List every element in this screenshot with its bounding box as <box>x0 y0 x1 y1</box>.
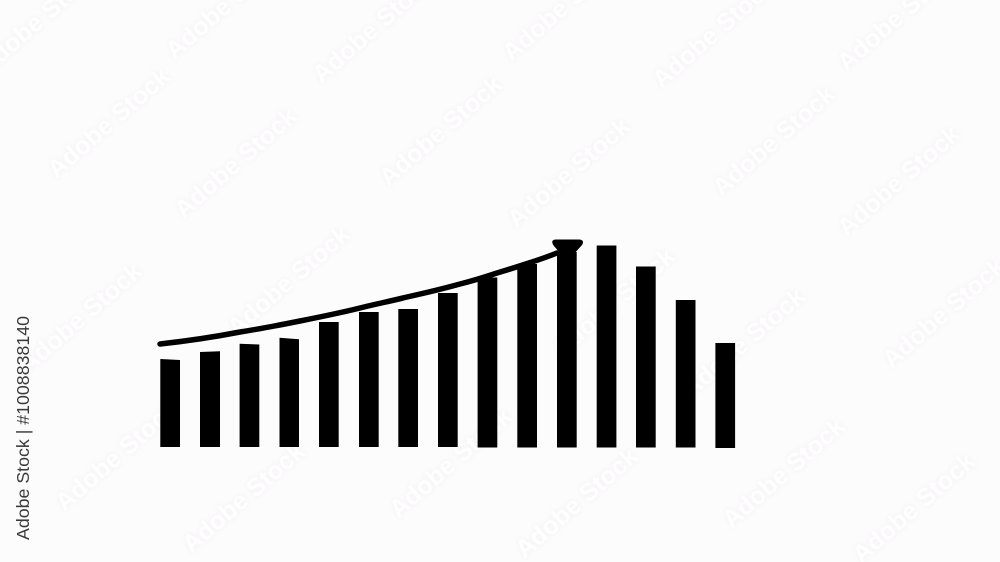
watermark text layer: Adobe Stock <box>42 62 176 184</box>
watermark text layer: Adobe Stock <box>374 70 508 192</box>
watermark shadow layer: Adobe Stock <box>510 442 644 562</box>
bar 11 <box>557 252 577 448</box>
bar 15 <box>715 343 735 448</box>
watermark text layer: Adobe Stock <box>177 437 311 559</box>
stock id label: Adobe Stock | #1008838140 <box>13 316 33 540</box>
bar 12 <box>597 246 616 448</box>
watermark text layer: Adobe Stock <box>169 102 303 224</box>
watermark shadow layer: Adobe Stock <box>502 112 636 234</box>
watermark shadow layer: Adobe Stock <box>547 242 681 364</box>
watermark text layer: Adobe Stock <box>717 412 851 534</box>
watermark shadow layer: Adobe Stock <box>177 437 311 559</box>
bar 3 <box>240 344 259 447</box>
bar 13 <box>636 266 656 448</box>
bar 10 <box>517 264 537 448</box>
bar 7 <box>398 309 418 447</box>
watermark shadow layer: Adobe Stock <box>707 80 841 202</box>
bar 5 <box>319 322 339 447</box>
trend arrow <box>160 240 583 344</box>
bar 14 <box>676 300 696 448</box>
watermark shadow layer: Adobe Stock <box>222 220 356 342</box>
watermark text layer: Adobe Stock <box>677 282 811 404</box>
watermark text layer: Adobe Stock <box>547 242 681 364</box>
bar chart <box>160 246 735 448</box>
arrow head <box>552 240 583 258</box>
watermark shadow layer: Adobe Stock <box>717 412 851 534</box>
bar 2 <box>200 351 220 447</box>
watermark shadow layer: Adobe Stock <box>169 102 303 224</box>
watermark text layer: Adobe Stock <box>502 112 636 234</box>
bar 9 <box>478 278 497 448</box>
watermark text layer: Adobe Stock <box>222 220 356 342</box>
watermark shadow layer: Adobe Stock <box>677 282 811 404</box>
watermark text layer: Adobe Stock <box>384 402 518 524</box>
watermark shadow layer: Adobe Stock <box>832 120 966 242</box>
watermark text layer: Adobe Stock <box>832 120 966 242</box>
watermark shadow layer: Adobe Stock <box>374 70 508 192</box>
bar 6 <box>359 312 379 447</box>
watermark shadow layer: Adobe Stock <box>14 257 148 379</box>
watermark text layer: Adobe Stock <box>14 257 148 379</box>
watermark shadow layer: Adobe Stock <box>42 62 176 184</box>
watermark text layer: Adobe Stock <box>510 442 644 562</box>
bar 4 <box>280 338 299 447</box>
bar 8 <box>438 293 458 447</box>
watermark text layer: Adobe Stock <box>50 395 184 517</box>
arrow line <box>160 253 557 344</box>
watermark shadow layer: Adobe Stock <box>384 402 518 524</box>
watermark shadow layer: Adobe Stock <box>50 395 184 517</box>
bar 1 <box>160 359 180 447</box>
watermark text layer: Adobe Stock <box>707 80 841 202</box>
